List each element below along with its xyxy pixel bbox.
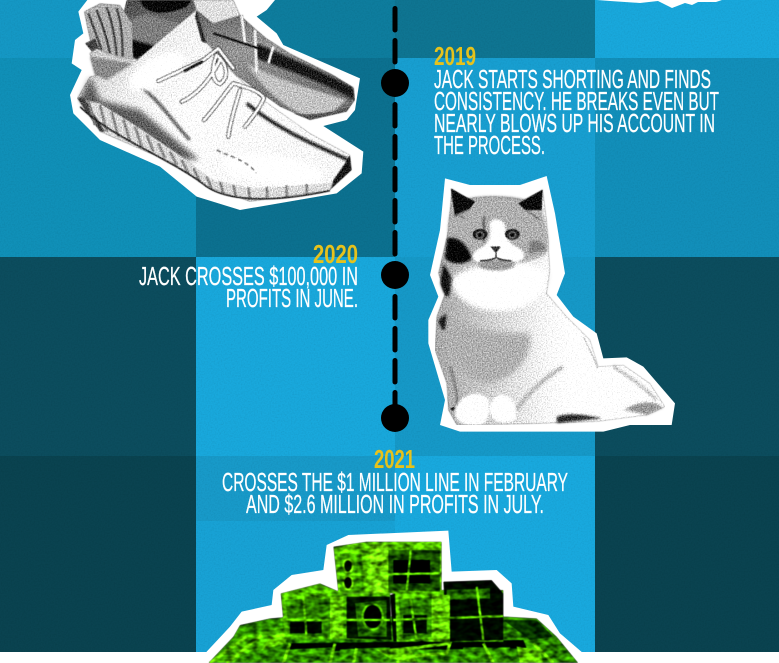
description: 2019	[434, 66, 719, 160]
timeline: dashed line with year markers	[381, 8, 409, 432]
year: 2020: 2020	[313, 241, 358, 269]
event: 2021	[222, 446, 568, 519]
description: 2020: PROFITS IN JUNE.	[226, 285, 358, 313]
cat nose and mouth	[490, 246, 501, 253]
cash bundle: right	[390, 580, 503, 642]
sneaker white cut-out outline	[70, 0, 363, 210]
cat chest	[452, 264, 547, 310]
cash photo	[208, 542, 578, 663]
cash bundle: top	[333, 542, 442, 593]
cat eyes	[473, 229, 487, 240]
description: 2020: JACK CROSSES $100,000 IN	[139, 263, 358, 291]
front sneaker ribbed sole	[77, 97, 333, 202]
sneaker photo	[77, 0, 355, 202]
front sneaker shading	[80, 10, 352, 190]
image: pair of sneakers	[70, 0, 363, 210]
cash bundle: left	[281, 583, 392, 640]
description: 2021: AND $2.6 MILLION IN PROFITS IN JULY.	[246, 491, 544, 519]
marker: 2019	[381, 69, 409, 97]
sneaker laces	[158, 48, 264, 137]
cat head	[445, 188, 548, 271]
sneaker heel collar	[84, 3, 133, 60]
front sneaker upper	[77, 10, 352, 202]
description: 2020	[139, 263, 358, 313]
back sneaker	[117, 0, 355, 120]
cat body	[435, 188, 665, 425]
marker: 2020	[381, 261, 409, 289]
cat white cut-out outline	[428, 176, 675, 432]
cash white cut-out outline	[203, 531, 583, 663]
cat photo	[435, 188, 665, 425]
event: 2020	[139, 241, 358, 313]
description: 2021: CROSSES THE $1 MILLION LINE IN FEBRUARY	[222, 469, 568, 497]
marker: 2021	[381, 404, 409, 432]
event: 2019	[434, 43, 719, 160]
image: fluffy cat	[428, 176, 675, 432]
year: 2019: 2019	[434, 43, 476, 71]
description: 2019: THE PROCESS.	[434, 132, 545, 160]
year: 2021: 2021	[374, 446, 415, 474]
image: pile of green cash bundles	[203, 531, 583, 663]
description: 2021	[222, 469, 568, 519]
cat fur shading	[438, 263, 663, 425]
cash base layer	[208, 617, 578, 663]
image: white cut-out corner at top right	[597, 0, 722, 8]
